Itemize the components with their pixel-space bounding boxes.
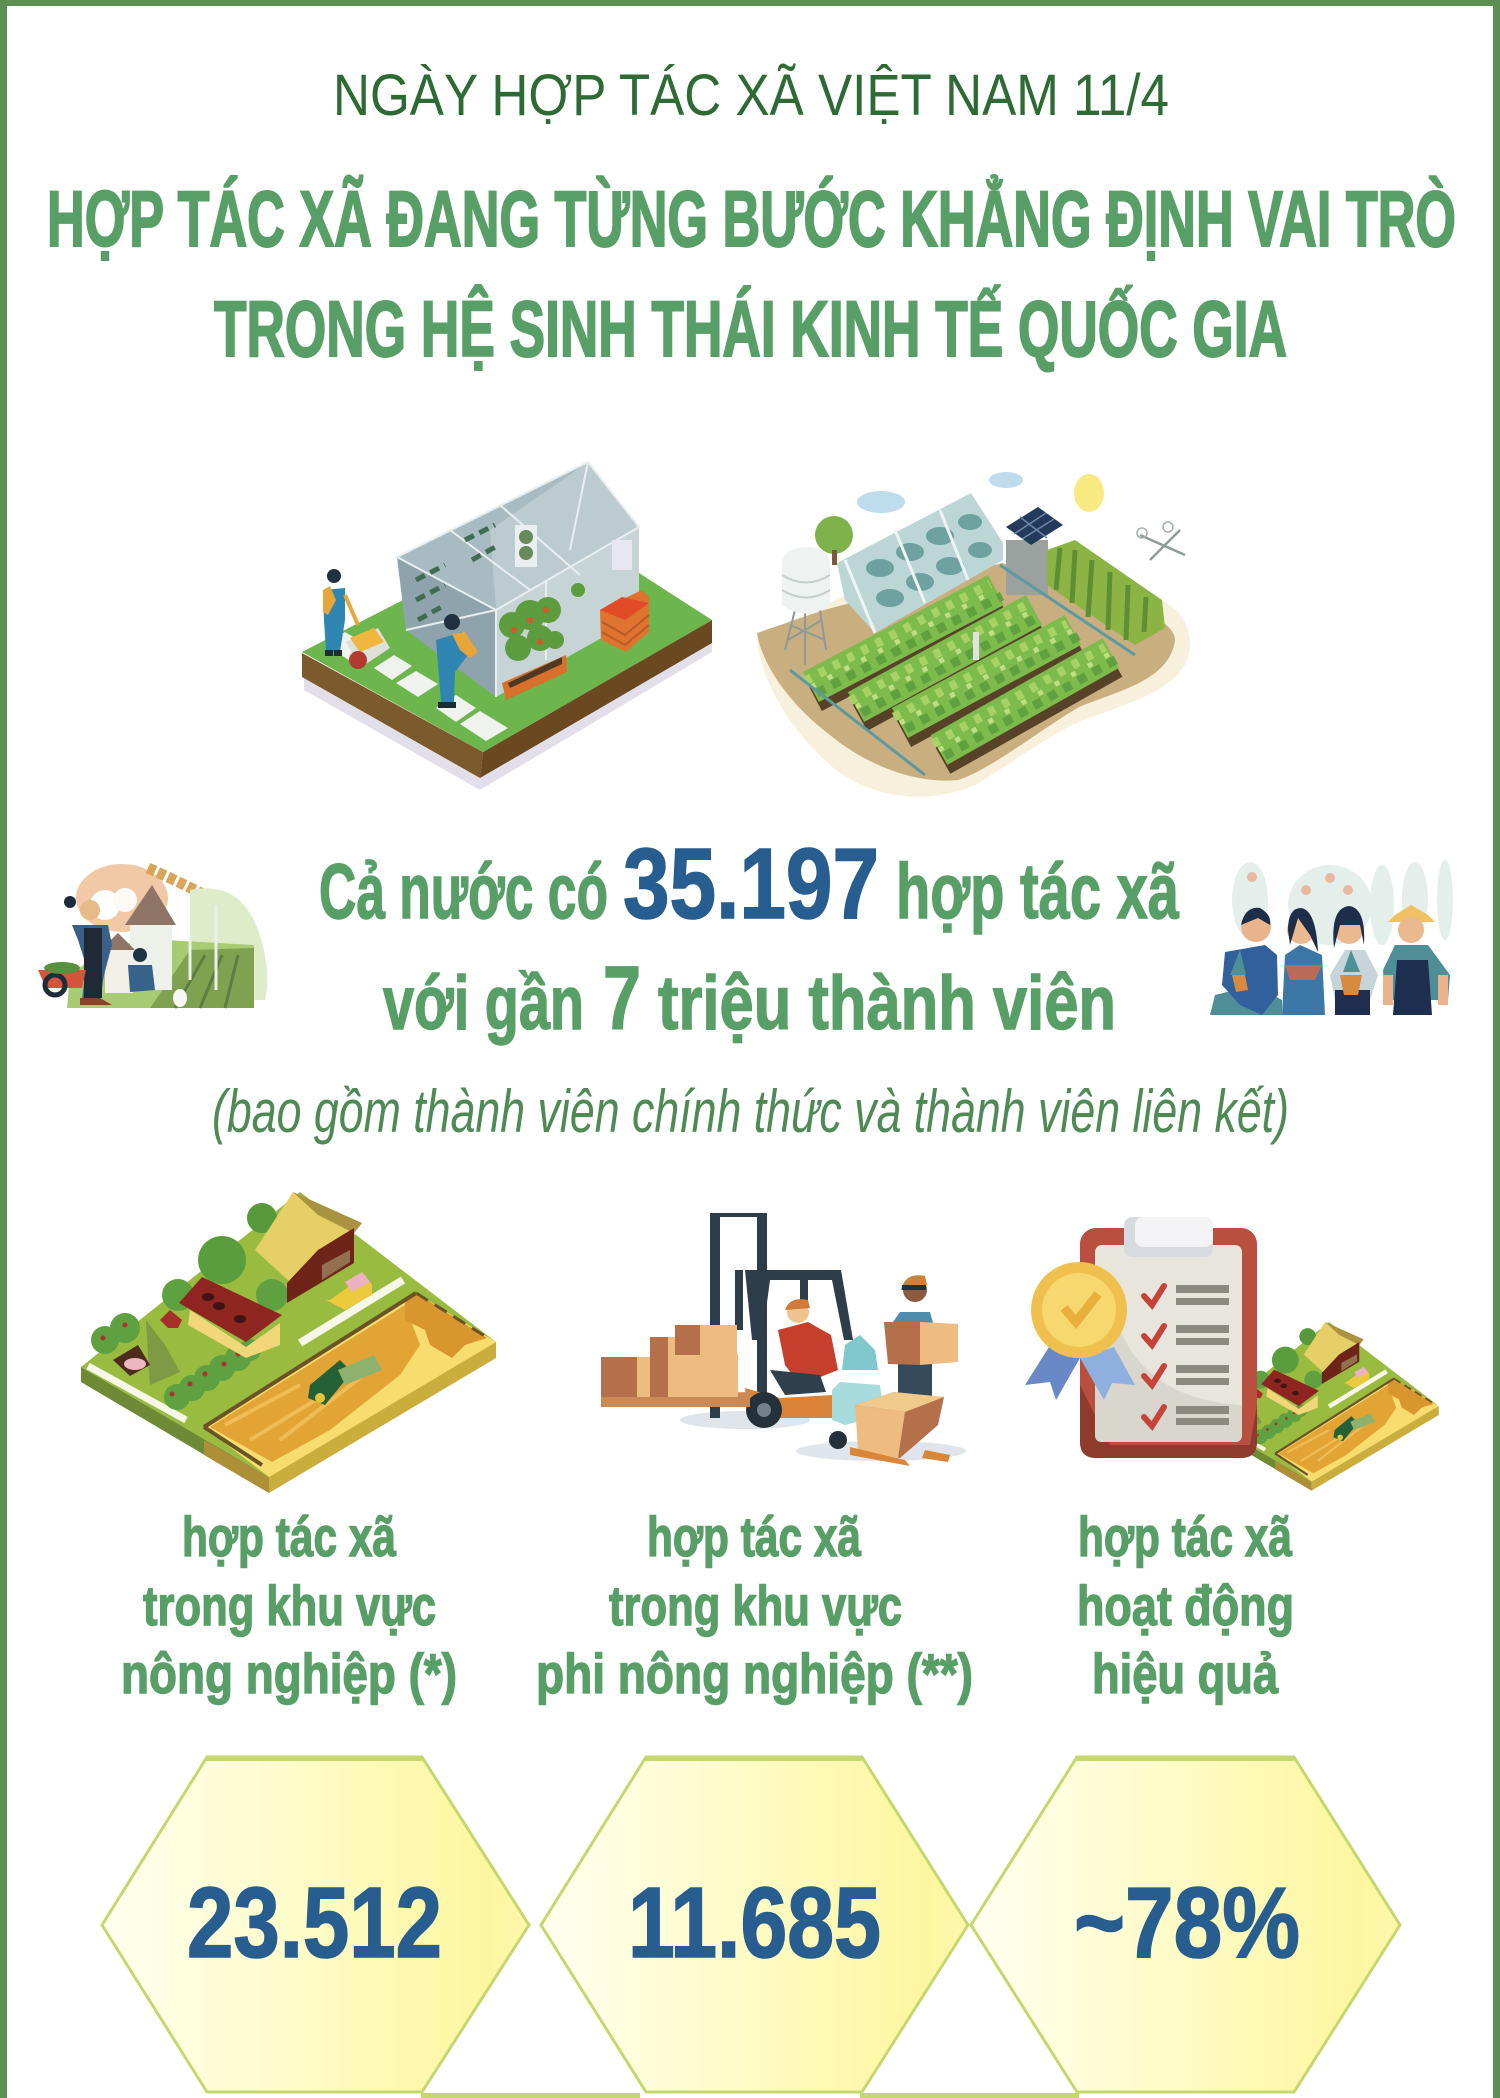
headline: 35,197 cooperatives <box>319 828 1179 940</box>
headline: nearly 7 million members: triệu thành viên <box>658 961 1116 1046</box>
label: effective cooperatives <box>1077 1505 1294 1705</box>
headline: 35,197 cooperatives: 35.197 <box>623 828 879 940</box>
next row hexagon tops <box>421 2093 1079 2098</box>
label: effective cooperatives: hiệu quả <box>1092 1642 1279 1705</box>
heading: main title <box>47 174 1456 373</box>
hexagon: 11,685 <box>541 1756 968 2092</box>
label: effective cooperatives: hợp tác xã <box>1078 1505 1293 1568</box>
headline: nearly 7 million members <box>383 949 1116 1049</box>
label: agricultural cooperatives: hợp tác xã <box>182 1505 397 1568</box>
illustration: smart vegetable farm <box>757 472 1190 797</box>
label: non-agricultural cooperatives: phi nông nghiệp (**) <box>536 1642 973 1705</box>
illustration: greenhouse garden <box>302 462 712 790</box>
label: agricultural cooperatives: trong khu vực <box>143 1574 436 1637</box>
title: day of cooperatives: NGÀY HỢP TÁC XÃ VIỆT NAM 11/4 <box>333 63 1169 128</box>
hexagon: 23,512: 23.512 <box>187 1867 442 1979</box>
illustration: checklist clipboard with medal <box>1025 1217 1257 1458</box>
icon: farmer with wheelbarrow <box>38 864 267 1008</box>
hexagon: about 78 percent <box>971 1756 1400 2092</box>
hexagon: 11,685: 11.685 <box>628 1867 881 1979</box>
label: agricultural cooperatives: nông nghiệp (*) <box>121 1642 457 1705</box>
illustration: agricultural farm <box>81 1192 496 1493</box>
label: effective cooperatives: hoạt động <box>1077 1574 1294 1637</box>
illustration: mini farm behind the clipboard <box>1206 1322 1439 1491</box>
headline: nearly 7 million members: 7 <box>603 949 641 1049</box>
hexagon: 23,512 <box>102 1756 529 2092</box>
headline: 35,197 cooperatives: hợp tác xã <box>896 847 1179 935</box>
label: non-agricultural cooperatives: hợp tác xã <box>647 1505 862 1568</box>
label: non-agricultural cooperatives <box>536 1505 973 1705</box>
label: non-agricultural cooperatives: trong khu vực <box>609 1574 902 1637</box>
headline: nearly 7 million members: với gần <box>383 961 584 1046</box>
illustration: forklift and warehouse workers <box>601 1213 966 1466</box>
hexagon: about 78 percent: ~78% <box>1074 1867 1300 1979</box>
icon: group of cooperative members <box>1210 860 1453 1015</box>
headline: 35,197 cooperatives: Cả nước có <box>319 847 608 935</box>
label: agricultural cooperatives <box>121 1505 457 1705</box>
